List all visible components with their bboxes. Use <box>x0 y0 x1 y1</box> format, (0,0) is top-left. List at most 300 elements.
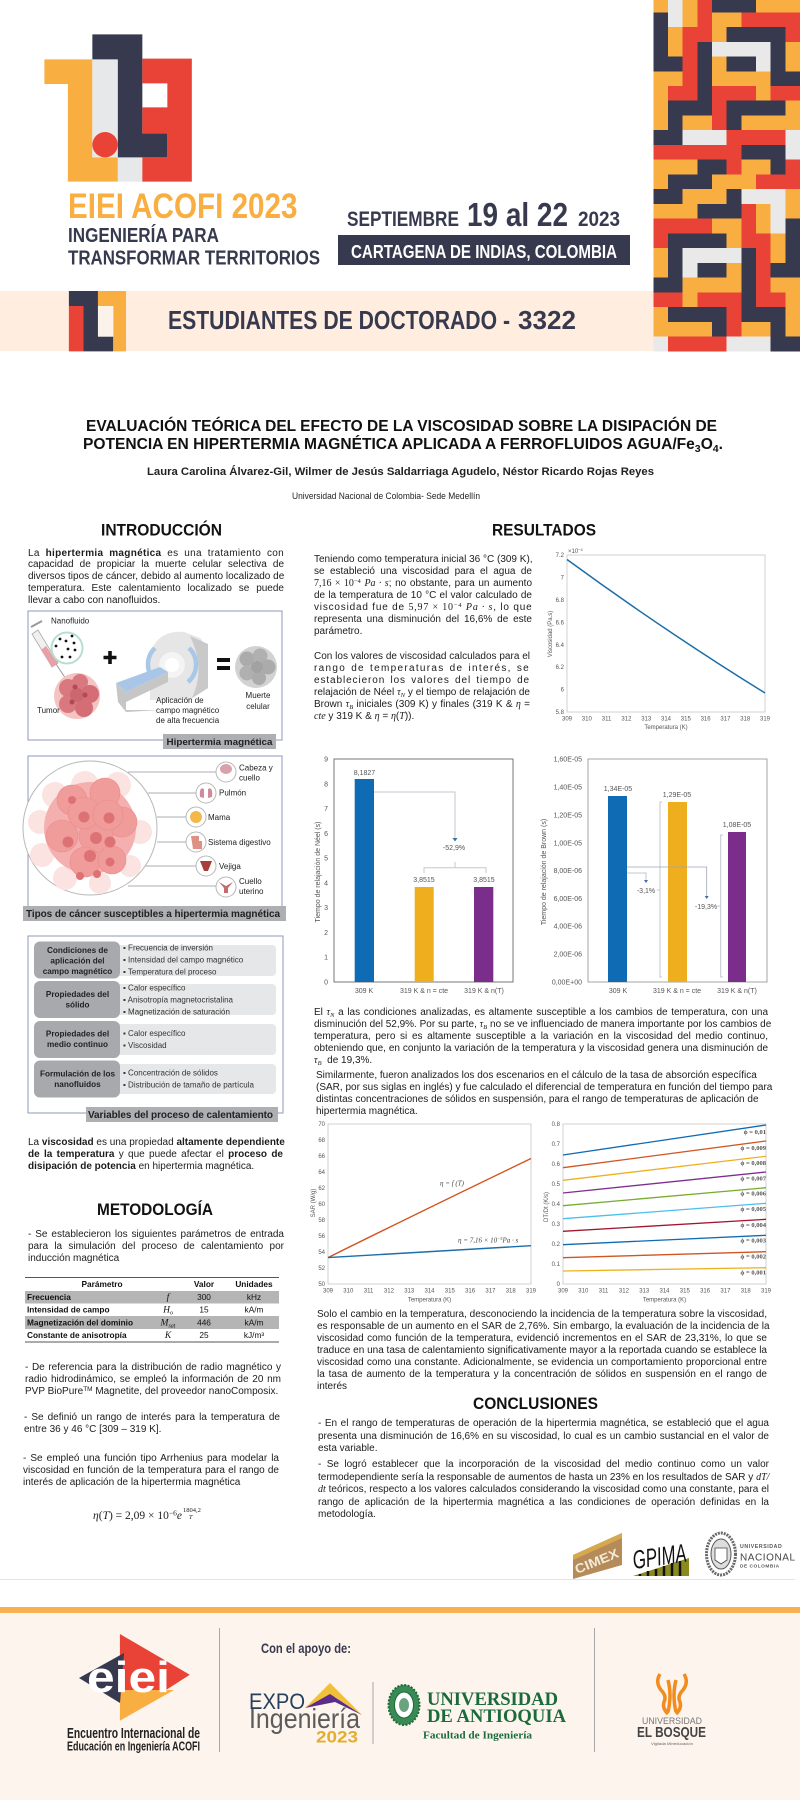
chart: SAR: Pa · s <box>501 1237 518 1245</box>
chart: dT/dt: DT/Dt (K/s) <box>544 1192 550 1222</box>
chart: viscosidad vs temperatura: 311 <box>602 717 612 723</box>
labels inside panel: celular <box>246 702 270 711</box>
text block: metodología rango: entre 36 y 46 °C [309 – 319 K]. <box>24 1424 161 1435</box>
chart: SAR: 313 <box>404 1289 415 1295</box>
chart: dT/dt: 309 <box>558 1289 569 1295</box>
logo: Expo Ingeniería 2023: Ingeniería <box>249 1703 360 1734</box>
organ labels: Mama <box>208 813 231 822</box>
chart: viscosidad vs temperatura: 317 <box>720 717 731 723</box>
text block: introducción: llevar a cabo con nanofluidos. <box>28 595 160 606</box>
text block: metodología Arrhenius: - Se empleó una función tipo Arrhenius para modelar la <box>23 1453 279 1464</box>
axis labels: 4 <box>324 880 328 887</box>
logo: Expo Ingeniería 2023 <box>249 1683 362 1747</box>
chart: tiempo de relajación de Néel: 319 K & n = cte <box>400 988 448 995</box>
chart: SAR: 62 <box>318 1186 326 1192</box>
text block: análisis Néel y Brown: temperatura, pero si es altamente susceptible a la variación en la viscosidad del medio continuo, <box>314 1031 768 1042</box>
chart: SAR: 52 <box>318 1266 326 1272</box>
chart: viscosidad vs temperatura: Viscosidad (Pa.s) <box>548 611 554 657</box>
table: parámetros: Frecuencia <box>27 1292 71 1302</box>
organ labels: Vejiga <box>219 862 241 871</box>
logo: Universidad de Antioquia: Facultad de Ingeniería <box>423 1730 532 1742</box>
logo: Universidad El Bosque <box>637 1674 706 1746</box>
table: parámetros: 15 <box>199 1305 209 1315</box>
chart: dT/dt: ϕ = 0,001 <box>740 1269 766 1276</box>
text block: metodología Arrhenius: interés de aplicación de la hipertermia magnética <box>23 1477 240 1488</box>
poster title: POTENCIA EN HIPERTERMIA MAGNÉTICA APLICADA A FERROFLUIDOS AGUA/Fe <box>83 436 692 453</box>
chart: SAR: 309 <box>323 1289 334 1295</box>
text block: conclusión 2: termodependiente sería la responsable de aumentos de hasta un 23% en los resultados de SAR y dT/ <box>318 1472 769 1483</box>
category labels: aplicación del <box>50 956 105 966</box>
panel: variables del proceso <box>28 936 283 1122</box>
chart: dT/dt: 0.2 <box>552 1242 561 1248</box>
category labels: sólido <box>65 1000 90 1010</box>
text block: resultados tiempos de relajación: cte y 319 K & η = η(T)). <box>314 711 414 722</box>
axis labels <box>324 756 328 986</box>
chart: SAR: 311 <box>364 1289 374 1295</box>
heading: introducción: INTRODUCCIÓN <box>101 521 222 540</box>
affiliation: Universidad Nacional de Colombia- Sede Medellín <box>292 491 480 502</box>
panel caption: Variables del proceso de calentamiento <box>88 1110 273 1121</box>
text block: discusión SAR: es responsable de un aumento en el SAR de 2,76%. Sin embargo, la evaluación de la incidencia de la <box>317 1321 770 1332</box>
icon: dead cell cluster <box>235 646 277 688</box>
category labels <box>40 946 115 1089</box>
table: parámetros: sat <box>168 1324 176 1330</box>
category labels: Formulación de los <box>40 1070 115 1078</box>
chart: SAR: 66 <box>318 1154 326 1160</box>
axis labels: 1 <box>324 955 328 962</box>
table: parámetros: Unidades <box>235 1279 273 1289</box>
chart: SAR: Temperatura (K) <box>408 1298 451 1304</box>
text block: metodología referencia: radio hidrodinámico, se empleó la información de 20 nm <box>25 1374 281 1385</box>
chart: dT/dt: 316 <box>700 1289 711 1295</box>
variable lists: ▪ Viscosidad <box>123 1041 167 1050</box>
chart: SAR: η = 7,16 × 10 <box>458 1237 497 1245</box>
text block: viscosidad: disipación de potencia en hipertermia magnética. <box>28 1161 254 1172</box>
chart: viscosidad vs temperatura: 313 <box>641 717 652 723</box>
section band title: 3322 <box>518 305 576 335</box>
variable lists: ▪ Intensidad del campo magnético <box>123 956 244 965</box>
mosaic pattern panel <box>653 0 800 351</box>
heading: conclusiones: CONCLUSIONES <box>473 1395 598 1413</box>
chart: viscosidad vs temperatura: 6.4 <box>556 643 565 649</box>
organ labels: Cabeza y <box>239 764 273 773</box>
chart: viscosidad vs temperatura: 6.6 <box>556 620 565 626</box>
axis labels: 2,00E-06 <box>554 952 582 958</box>
event title text: EIEI ACOFI 2023 <box>68 187 298 226</box>
chart: viscosidad vs temperatura: 318 <box>740 717 751 723</box>
text block: viscosidad: de la temperatura y que puede afectar el proceso de <box>28 1149 283 1160</box>
table: parámetros: 446 <box>197 1318 211 1328</box>
logo: Universidad de Antioquia: DE ANTIOQUIA <box>427 1706 566 1727</box>
axis labels: 3 <box>324 905 328 912</box>
organ labels: cuello <box>239 774 260 783</box>
chart: SAR: 68 <box>318 1138 326 1144</box>
logo: GPIMA <box>631 1538 689 1576</box>
chart: SAR: 315 <box>445 1289 455 1295</box>
axis labels: 1,40E-05 <box>554 784 582 792</box>
chart: SAR: 317 <box>485 1289 496 1295</box>
axis labels: 0,00E+00 <box>552 980 582 986</box>
poster title <box>83 417 723 455</box>
category labels: Condiciones de <box>47 946 108 955</box>
chart: tiempo de relajación de Brown: Tiempo de relajación de Brown (s) <box>541 819 548 925</box>
table: parámetros: M <box>161 1318 168 1328</box>
text block: resultados viscosidad: 7,16 × 10−4 Pa · s; no obstante, para un aumento <box>314 578 532 589</box>
text block: resultados tiempos de relajación: establecieron los valores del tiempo de <box>314 675 530 686</box>
labels inside panel: Tumor <box>37 706 60 715</box>
axis labels: 2 <box>324 930 328 937</box>
text block: análisis Néel y Brown <box>314 1007 771 1067</box>
table: parámetros: 25 <box>199 1330 209 1340</box>
logo: eiei <box>67 1634 200 1754</box>
axis labels: 4,00E-06 <box>554 924 582 930</box>
icon: cancer cell cluster <box>23 761 157 895</box>
chart: dT/dt: ϕ = 0,01 <box>744 1129 766 1136</box>
chart: tiempo de relajación de Néel: 3,8515 <box>473 877 495 884</box>
chart: SAR: 60 <box>318 1202 326 1208</box>
text block: metodología referencia: PVP BioPureTM Magnetite, del proveedor nanoComposix. <box>25 1386 278 1397</box>
chart: dT/dt: Temperatura (K) <box>643 1298 686 1304</box>
text block: resultados tiempos de relajación: Con los valores de viscosidad calculados para el <box>314 651 530 662</box>
chart: viscosidad vs temperatura: −4 <box>578 547 584 552</box>
text block: análisis Néel y Brown: disminución del 52,9%. Por su parte, τB no se ve influenciado de manera importante por los cambios de <box>314 1019 771 1031</box>
text block: discusión SAR: traduce en una tasa de calentamiento significativamente mayor a la reportada cuando se establece la <box>317 1345 767 1356</box>
text block: metodología referencia: - De referencia para la distribución de radio magnético y <box>25 1362 281 1373</box>
chart: dT/dt: 310 <box>578 1289 589 1295</box>
panel caption: Hipertermia magnética <box>166 737 273 748</box>
chart: dT/dt: 315 <box>680 1289 690 1295</box>
chart: viscosidad vs temperatura: 314 <box>661 717 672 723</box>
text block: discusión SAR: interés <box>317 1381 347 1392</box>
text block: metodología rango: - Se definió un rango de interés para la temperatura de <box>24 1412 280 1423</box>
chart: viscosidad vs temperatura: ×10 <box>568 549 578 555</box>
text block: análisis Néel y Brown: τB de 19,3%. <box>314 1055 372 1067</box>
text block: conclusión 1: presenta una disminución de 16,6% en su viscosidad, lo cual es un cambio sustancial en el valor de <box>318 1431 769 1442</box>
chart: SAR: SAR (W/g) <box>311 1189 317 1217</box>
logo: Universidad Nacional de Colombia: NACIONAL <box>740 1553 795 1564</box>
chart: viscosidad vs temperatura: 315 <box>681 717 691 723</box>
variable lists: ▪ Concentración de sólidos <box>123 1069 218 1078</box>
text block: viscosidad <box>28 1137 285 1172</box>
icon: tumor <box>54 673 100 719</box>
chart: tiempo de relajación de Brown: 1,34E-05 <box>604 786 632 793</box>
chart: tiempo de relajación de Brown: -19,3% <box>695 904 717 911</box>
chart: dT/dt: 0.7 <box>552 1142 561 1148</box>
footer background <box>0 1613 800 1800</box>
organ labels <box>208 764 273 896</box>
text block: SAR: (SAR, por sus siglas en inglés) y fue calculado el diferencial de temperatura en función del tiempo para <box>316 1082 772 1093</box>
chart: dT/dt: 0.1 <box>552 1262 561 1268</box>
event date: 19 al 22 <box>467 196 568 233</box>
labels inside panel: de alta frecuencia <box>156 716 220 725</box>
chart: viscosidad vs temperatura: 316 <box>701 717 711 723</box>
icon: equals <box>217 658 230 670</box>
event title text <box>68 187 320 270</box>
formula: η(T) = 2,09 × 10 <box>93 1510 169 1522</box>
icon: event logo 1.13 <box>44 34 192 182</box>
panel caption: Tipos de cáncer susceptibles a hipertermia magnética <box>26 909 280 920</box>
logo: Universidad El Bosque: UNIVERSIDAD <box>642 1716 702 1727</box>
axis labels: 9 <box>324 756 328 764</box>
chart: SAR: 314 <box>424 1289 435 1295</box>
chart: viscosidad vs temperatura: 7.2 <box>556 553 565 559</box>
table: parámetros: K <box>164 1331 172 1341</box>
event title text: INGENIERÍA PARA <box>68 224 219 247</box>
axis labels: 8 <box>324 781 328 788</box>
table: parámetros: o <box>170 1311 173 1317</box>
chart: SAR: 58 <box>318 1218 326 1224</box>
logo: Universidad Nacional de Colombia <box>706 1533 795 1575</box>
chart: SAR: 64 <box>318 1170 326 1176</box>
chart: SAR: 50 <box>318 1282 326 1288</box>
logo: GPIMA: GPIMA <box>631 1538 688 1575</box>
authors: Laura Carolina Álvarez-Gil, Wilmer de Jesús Saldarriaga Agudelo, Néstor Ricardo Rojas Reyes <box>147 465 654 478</box>
category labels: campo magnético <box>43 967 112 976</box>
table: parámetros: Valor <box>194 1279 215 1289</box>
logo: eiei: eiei <box>87 1653 170 1702</box>
footer dividers <box>220 1628 594 1752</box>
text block: conclusión 2 <box>318 1459 770 1520</box>
text block: SAR: distintas concentraciones de sólidos en suspensión, para el rango de temperaturas de aplicación de <box>316 1094 758 1105</box>
chart: SAR: −5 <box>497 1236 503 1241</box>
axis labels: 6,00E-06 <box>554 896 582 903</box>
text block: introducción: temperatura. Este calentamiento localizado se puede <box>28 583 284 594</box>
chart: tiempo de relajación de Néel: 8,1827 <box>354 770 375 777</box>
text block: análisis Néel y Brown: El τN a las condiciones analizadas, es altamente susceptible a los cambios de temperatura, con una <box>314 1007 768 1019</box>
text block: discusión SAR <box>317 1309 770 1392</box>
variable lists: ▪ Frecuencia de inversión <box>123 944 213 953</box>
icon: small band logo <box>69 291 126 351</box>
chart: viscosidad vs temperatura: 6 <box>561 688 565 694</box>
table: parámetros: Constante de anisotropía <box>27 1330 127 1340</box>
poster title: O <box>701 436 713 453</box>
chart: dT/dt: 314 <box>659 1289 670 1295</box>
text block: metodología referencia <box>25 1362 281 1397</box>
connector annotation <box>374 792 486 873</box>
chart: dT/dt: 317 <box>720 1289 731 1295</box>
heading: metodología: METODOLOGÍA <box>97 1200 213 1219</box>
chart: viscosidad vs temperatura: 309 <box>562 717 573 723</box>
table: parámetros: 300 <box>197 1292 211 1302</box>
logo: CIMEX: CIMEX <box>573 1546 621 1577</box>
logo: eiei: Educación en Ingeniería ACOFI <box>67 1739 200 1754</box>
bars <box>355 779 493 982</box>
text block: discusión SAR: viscosidad como función de la temperatura, evidenció incrementos en el SAR de 23,31%, lo que se <box>317 1333 767 1344</box>
text block: introducción <box>28 548 284 606</box>
chart: SAR: 318 <box>506 1289 516 1295</box>
category labels: Propiedades del <box>46 990 109 999</box>
formula: T <box>189 1514 193 1521</box>
chart: SAR: 70 <box>318 1122 326 1128</box>
chart: tiempo de relajación de Brown: 309 K <box>609 988 627 995</box>
formula: −6 <box>169 1508 177 1518</box>
logo: Universidad El Bosque: Vigilada Mineducación <box>651 1742 693 1746</box>
table: parámetros <box>25 1278 279 1342</box>
text block: resultados tiempos de relajación: relajación de Néel τN y el tiempo de relajación de <box>314 687 530 699</box>
text block: introducción: La hipertermia magnética es una tratamiento con <box>28 548 284 559</box>
event location banner: CARTAGENA DE INDIAS, COLOMBIA <box>351 242 617 262</box>
event date: SEPTIEMBRE <box>347 208 459 231</box>
chart: dT/dt: 0.4 <box>552 1202 561 1208</box>
chart: dT/dt: ϕ = 0,005 <box>740 1206 767 1213</box>
chart: tiempo de relajación de Néel: 309 K <box>355 988 373 995</box>
chart: viscosidad vs temperatura: 7 <box>561 576 565 582</box>
text block: discusión SAR: viscosidad como una constante. Adicionalmente, se evidencia un comportamiento proporcional entre <box>317 1357 767 1368</box>
text block: metodología parámetros: - Se establecieron los siguientes parámetros de entrada <box>28 1229 284 1240</box>
chart: SAR: 54 <box>318 1250 326 1256</box>
text block: conclusión 2: dt teóricos, respecto a los valores calculados considerando la viscosidad como una constante, para el <box>318 1484 769 1495</box>
icon: plus <box>104 651 116 664</box>
heading: resultados: RESULTADOS <box>492 522 596 540</box>
organ labels: uterino <box>239 887 264 896</box>
category pills <box>34 942 120 1098</box>
variable lists: ▪ Temperatura del proceso <box>123 968 217 977</box>
axis labels <box>552 756 582 986</box>
poster title: 3 <box>695 443 701 455</box>
text block: resultados viscosidad: viscosidad fue de 5,97 × 10−4 Pa · s, lo que <box>314 602 532 613</box>
chart: viscosidad vs temperatura: 6.2 <box>556 665 565 671</box>
category labels: medio continuo <box>47 1040 108 1049</box>
text block: resultados tiempos de relajación <box>314 651 530 722</box>
icon: MRI machine <box>116 632 208 712</box>
axis labels: 1,60E-05 <box>554 756 582 764</box>
formula: 1804,2 <box>183 1507 201 1514</box>
organ labels: Cuello <box>239 877 262 886</box>
footer orange bar <box>0 1607 800 1613</box>
variable lists: ▪ Calor específico <box>123 984 186 993</box>
organ labels: Sistema digestivo <box>208 838 271 847</box>
connector lines <box>128 772 216 886</box>
table: parámetros: Parámetro <box>81 1279 123 1289</box>
text block: metodología parámetros <box>28 1229 284 1264</box>
text: con el apoyo de: Con el apoyo de: <box>261 1640 351 1656</box>
text block: SAR: Similarmente, fueron analizados los dos escenarios en el cálculo de la tasa de absorción específica <box>316 1070 757 1081</box>
chart: dT/dt: 0.5 <box>552 1182 561 1188</box>
chart: SAR: 312 <box>384 1289 395 1295</box>
logo: Universidad de Antioquia: UNIVERSIDAD <box>427 1689 558 1710</box>
table: parámetros: Intensidad de campo <box>27 1305 110 1315</box>
text block: discusión SAR: Solo el cambio en la temperatura, desconociendo la incidencia de la temperatura sobre la viscosidad, <box>317 1309 767 1320</box>
logo: CIMEX <box>573 1533 622 1579</box>
chart: dT/dt: ϕ = 0,007 <box>740 1176 767 1183</box>
chart: tiempo de relajación de Néel: 3,8515 <box>413 877 435 884</box>
variable lists: ▪ Magnetización de saturación <box>123 1008 230 1017</box>
axis labels: 1,20E-05 <box>554 812 582 820</box>
text block: conclusión 1: esta variable. <box>318 1443 377 1454</box>
chart: dT/dt: ϕ = 0,008 <box>740 1160 767 1167</box>
text block: SAR: hipertermia magnética. <box>316 1106 418 1117</box>
text block: metodología Arrhenius: viscosidad en función de la temperatura para el rango de <box>23 1465 279 1476</box>
logo: Universidad Nacional de Colombia: DE COLOMBIA <box>740 1564 780 1570</box>
text block: conclusión 2: metodología. <box>318 1509 376 1520</box>
variable lists <box>123 944 254 1090</box>
text block: viscosidad: La viscosidad es una propiedad altamente dependiente <box>28 1137 285 1148</box>
text block: resultados viscosidad: Teniendo como temperatura inicial 36 °C (309 K), <box>314 554 533 565</box>
axis labels: 5 <box>324 856 328 863</box>
text block: resultados viscosidad: de la temperatura de 10 °C el valor calculado de <box>314 590 532 601</box>
chart: dT/dt: 0 <box>557 1282 561 1288</box>
bars <box>608 796 746 982</box>
text block: metodología Arrhenius <box>23 1453 279 1488</box>
labels inside panel: Nanofluido <box>51 616 90 626</box>
chart: tiempo de relajación de Brown: -3,1% <box>637 888 655 895</box>
icon: organ circles <box>186 762 236 897</box>
icon: syringe <box>31 621 68 682</box>
text block: metodología parámetros: inducción magnética <box>28 1253 119 1264</box>
labels inside panel: Muerte <box>246 691 271 700</box>
event location banner <box>338 235 630 265</box>
list backgrounds <box>110 945 276 1094</box>
chart: dT/dt: ϕ = 0,006 <box>740 1191 767 1198</box>
axis labels: 0 <box>324 980 328 986</box>
axis labels: 7 <box>324 806 328 813</box>
labels inside panel <box>37 616 271 725</box>
text block: resultados viscosidad <box>314 554 533 637</box>
chart: SAR <box>311 1122 537 1304</box>
axis labels: 1,00E-05 <box>554 840 582 848</box>
chart: dT/dt: 318 <box>741 1289 751 1295</box>
text block: resultados tiempos de relajación: rango de temperaturas de interés, se <box>314 663 530 674</box>
chart: dT/dt <box>544 1122 772 1304</box>
table: parámetros: f <box>167 1292 171 1303</box>
chart: viscosidad vs temperatura: 312 <box>621 717 632 723</box>
chart: viscosidad vs temperatura <box>548 547 771 731</box>
section band title: ESTUDIANTES DE DOCTORADO - <box>168 305 510 335</box>
panel: tipos de cáncer <box>23 756 286 921</box>
logo: eiei: Encuentro Internacional de <box>67 1725 200 1742</box>
text block: metodología rango <box>24 1412 280 1435</box>
chart: dT/dt: 0.8 <box>552 1122 561 1128</box>
panel: hipertermia magnética <box>28 611 282 749</box>
table: parámetros: kHz <box>247 1292 261 1302</box>
chart: dT/dt: ϕ = 0,009 <box>740 1145 767 1152</box>
text block: resultados viscosidad: parámetro. <box>314 626 362 637</box>
chart: tiempo de relajación de Néel: 319 K & n(T) <box>464 988 504 995</box>
text block: análisis Néel y Brown: obteniendo que, en conjunto la variación de la temperatura y la viscosidad genera una disminución de <box>314 1043 768 1054</box>
event date <box>347 196 620 233</box>
chart: tiempo de relajación de Néel: Tiempo de relajación de Néel (s) <box>315 822 322 922</box>
chart: viscosidad vs temperatura: 5.8 <box>556 710 565 716</box>
logo: Universidad de Antioquia <box>388 1685 566 1742</box>
event title text: TRANSFORMAR TERRITORIOS <box>68 248 320 270</box>
text block: discusión SAR: la tasa de aumento de la temperatura y la concentración de sólidos en suspensión en el rango de <box>317 1369 767 1380</box>
chart: dT/dt: 319 <box>761 1289 772 1295</box>
text block: resultados viscosidad: representa una disminución del 16,6% de este <box>314 614 532 625</box>
chart: dT/dt: 0.6 <box>552 1162 561 1168</box>
chart: SAR: 319 <box>526 1289 537 1295</box>
event date: 2023 <box>578 208 620 231</box>
chart: dT/dt: 311 <box>599 1289 609 1295</box>
connector annotation: -52,9% <box>443 845 465 852</box>
connector annotation <box>627 802 723 977</box>
chart: tiempo de relajación de Brown: 319 K & n = cte <box>653 988 701 995</box>
poster title: EVALUACIÓN TEÓRICA DEL EFECTO DE LA VISCOSIDAD SOBRE LA DISIPACIÓN DE <box>86 417 717 435</box>
poster title: . <box>719 436 723 453</box>
chart: tiempo de relajación de Brown <box>541 756 767 995</box>
chart: viscosidad vs temperatura: 319 <box>760 717 771 723</box>
table: parámetros: kA/m <box>245 1305 264 1315</box>
text block: SAR <box>316 1070 772 1117</box>
axis labels: 6 <box>324 831 328 838</box>
variable lists: ▪ Anisotropía magnetocristalina <box>123 996 234 1005</box>
chart: tiempo de relajación de Brown: 1,29E-05 <box>663 792 691 799</box>
variable lists: ▪ Calor específico <box>123 1029 186 1038</box>
text block: resultados viscosidad: se estableció una viscosidad para el agua de <box>314 566 532 577</box>
chart: tiempo de relajación de Brown: 319 K & n(T) <box>717 988 757 995</box>
text block: resultados tiempos de relajación: Brown τB iniciales (309 K) y finales (319 K & η = <box>314 699 530 711</box>
header band <box>0 291 654 351</box>
text block: conclusión 1: - En el rango de temperaturas de operación de la hipertermia magnética, se estableció que el agua <box>318 1418 769 1429</box>
